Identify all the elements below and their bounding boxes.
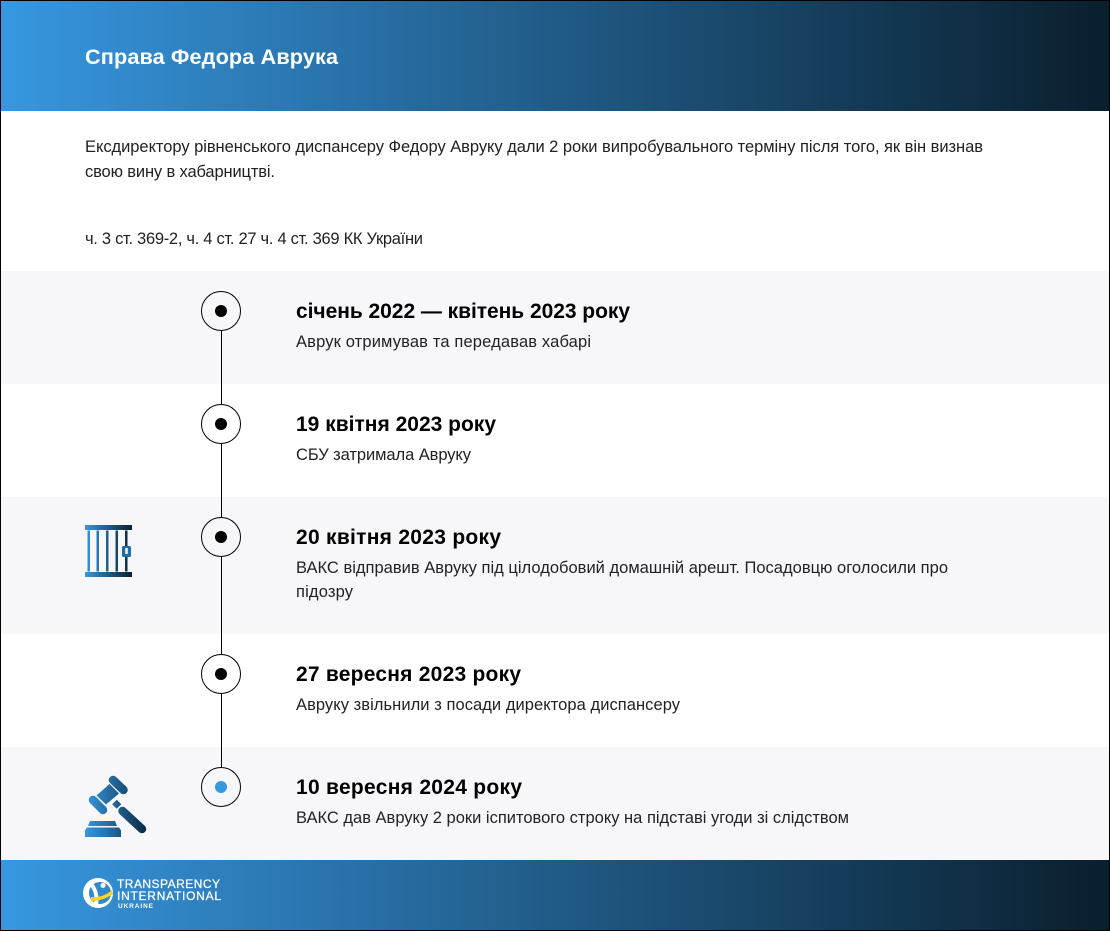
title: Справа Федора Аврука xyxy=(85,44,339,69)
timeline marker 2 xyxy=(202,404,240,444)
icon: prison bars xyxy=(85,525,132,577)
header band xyxy=(1,1,1109,111)
event 1: січень 2022 — квітень 2023 року xyxy=(296,300,630,323)
logo: Transparency International Ukraine: UKRAINE xyxy=(118,903,154,910)
event 1: Аврук отримував та передавав хабарі xyxy=(296,333,591,351)
legal reference: ч. 3 ст. 369-2, ч. 4 ст. 27 ч. 4 ст. 369 КК України xyxy=(85,230,423,248)
event 4 xyxy=(296,663,681,714)
event 1 xyxy=(296,300,630,351)
logo: Transparency International Ukraine xyxy=(83,877,221,910)
timeline line xyxy=(221,311,222,787)
event 3: ВАКС відправив Авруку під цілодобовий домашній арешт. Посадовцю оголосили про xyxy=(296,559,948,577)
event 4: Авруку звільнили з посади директора диспансеру xyxy=(296,696,681,714)
event 5: 10 вересня 2024 року xyxy=(296,776,522,799)
event 5 xyxy=(296,776,849,827)
timeline marker 3 xyxy=(202,518,240,556)
intro text: Ексдиректору рівненського диспансеру Федору Авруку дали 2 роки випробувального терміну після того, як він визнав xyxy=(85,138,983,156)
event 5: ВАКС дав Авруку 2 роки іспитового строку на підставі угоди зі слідством xyxy=(296,809,849,827)
timeline marker 4 xyxy=(202,654,240,694)
icon: gavel xyxy=(85,780,142,837)
event 2 xyxy=(296,413,496,464)
row backgrounds xyxy=(1,271,1109,860)
event 4: 27 вересня 2023 року xyxy=(296,663,521,686)
intro text: свою вину в хабарництві. xyxy=(85,163,275,181)
event 2: СБУ затримала Авруку xyxy=(296,446,472,464)
event 3: 20 квітня 2023 року xyxy=(296,526,501,549)
event 2: 19 квітня 2023 року xyxy=(296,413,496,436)
timeline marker 1 xyxy=(202,292,240,330)
timeline marker 5 xyxy=(202,768,240,806)
event 3: підозру xyxy=(296,583,354,601)
footer band xyxy=(1,860,1109,930)
intro text xyxy=(85,138,983,181)
logo: Transparency International Ukraine: TRANSPARENCY xyxy=(117,877,220,891)
event 3 xyxy=(296,526,948,601)
logo: Transparency International Ukraine: INTERNATIONAL xyxy=(117,889,221,903)
